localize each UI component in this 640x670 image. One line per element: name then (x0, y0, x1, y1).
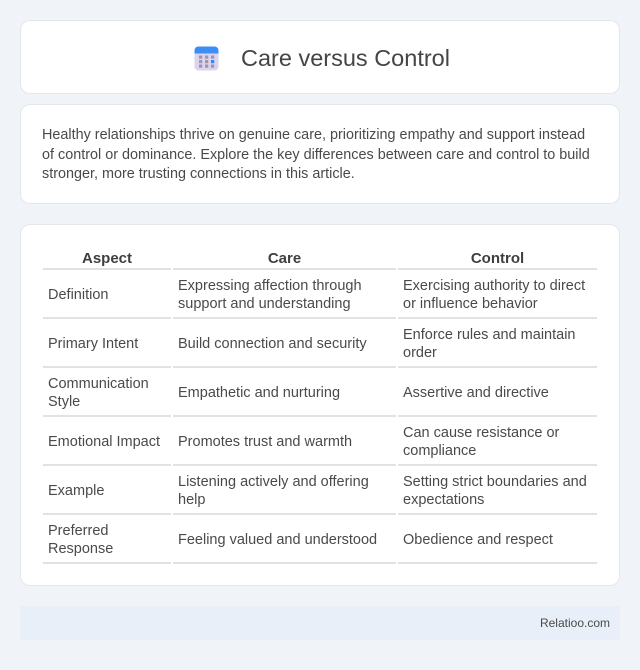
row: Preferred Response: Response (48, 541, 113, 557)
control: emotional impact: compliance (403, 443, 476, 459)
intro text (42, 127, 590, 182)
control: primary intent: order (403, 345, 437, 361)
title: Care versus Control (241, 45, 450, 71)
care: example: help (178, 492, 205, 508)
control: emotional impact: Can cause resistance or (403, 425, 559, 441)
footer bar (20, 606, 620, 640)
header: Aspect: Aspect (82, 250, 132, 267)
control: definition: Exercising authority to direct (403, 278, 585, 294)
care: definition (178, 278, 362, 312)
control: emotional impact (403, 425, 560, 459)
control: example (403, 474, 587, 508)
control: definition: or influence behavior (403, 296, 538, 312)
control: example: expectations (403, 492, 484, 508)
care: communication style: Empathetic and nurturing (178, 385, 340, 401)
care: definition: Expressing affection through (178, 278, 362, 294)
row: Preferred Response (48, 523, 113, 557)
row: Communication Style (48, 376, 149, 410)
panel: title card (20, 20, 620, 94)
control: definition (403, 278, 586, 312)
control: preferred response: Obedience and respect (403, 532, 553, 548)
row: Communication Style: Style (48, 394, 80, 410)
header: Care: Care (268, 250, 301, 267)
row: Definition: Definition (48, 287, 108, 303)
panel: comparison table (20, 224, 620, 586)
care: definition: support and understanding (178, 296, 351, 312)
icon: calendar (194, 46, 218, 70)
control: communication style: Assertive and directive (403, 385, 549, 401)
care: example (178, 474, 369, 508)
care: primary intent: Build connection and security (178, 336, 367, 352)
row: Preferred Response: Preferred (48, 523, 108, 539)
footer brand: Relatioo.com (540, 616, 610, 630)
control: primary intent: Enforce rules and maintain (403, 327, 576, 343)
panel: introduction (20, 104, 620, 204)
care: emotional impact: Promotes trust and warmth (178, 434, 352, 450)
intro text: stronger, more trusting connections in this article. (42, 166, 355, 182)
row: Emotional Impact: Emotional Impact (48, 434, 160, 450)
row: Communication Style: Communication (48, 376, 149, 392)
care: preferred response: Feeling valued and understood (178, 532, 377, 548)
control: example: Setting strict boundaries and (403, 474, 587, 490)
header: Control: Control (471, 250, 524, 267)
control: primary intent (403, 327, 576, 361)
row: Primary Intent: Primary Intent (48, 336, 138, 352)
intro text: Healthy relationships thrive on genuine care, prioritizing empathy and support instead (42, 127, 585, 143)
intro text: of control or dominance. Explore the key differences between care and control to build (42, 146, 590, 162)
row: Example: Example (48, 483, 104, 499)
care: example: Listening actively and offering (178, 474, 369, 490)
